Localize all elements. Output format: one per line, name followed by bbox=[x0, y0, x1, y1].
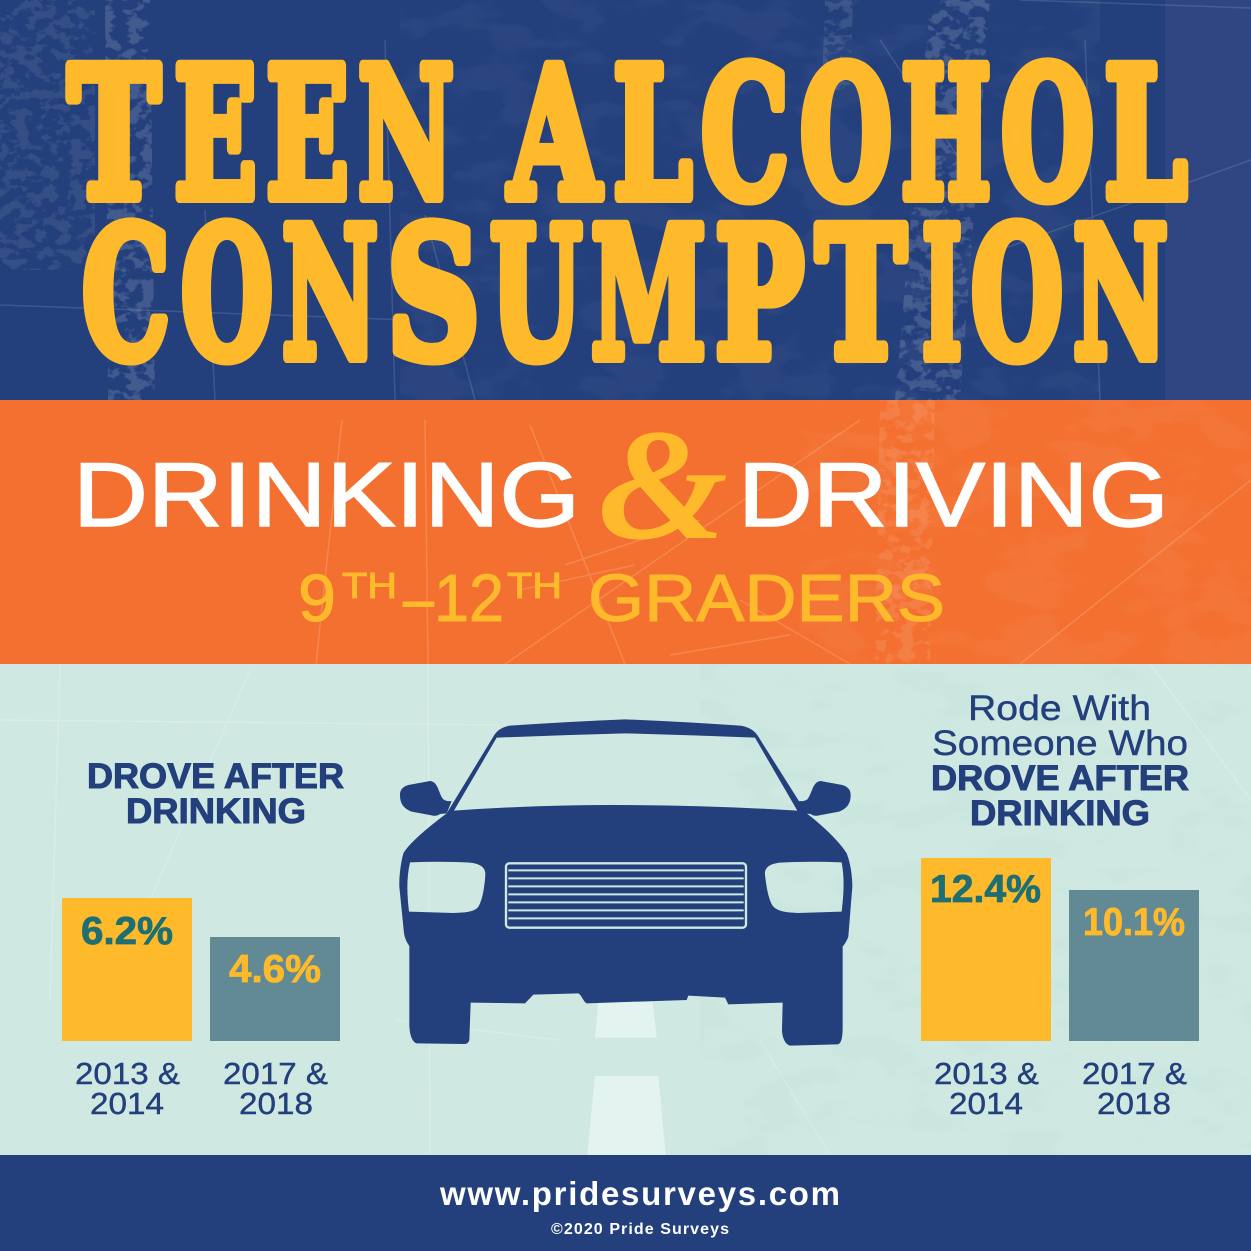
panel: rode with someone who drove after drinking bbox=[921, 689, 1199, 1121]
subtitle: drinking and driving: & bbox=[598, 397, 728, 573]
label: 2017 and 2018: 2018 bbox=[1097, 1086, 1171, 1121]
heading: drove after drinking bbox=[87, 757, 344, 831]
subtitle: grade range: 12 bbox=[434, 561, 504, 636]
title: N bbox=[282, 189, 378, 400]
panel: footer bbox=[0, 1155, 1251, 1251]
subtitle: drinking and driving: DRIVING bbox=[738, 445, 1169, 546]
label: 2013 and 2014 bbox=[934, 1056, 1039, 1121]
panel: navy title band bbox=[0, 0, 1251, 400]
bar: 2017 and 2018, 10.1%: 10.1% bbox=[1083, 901, 1185, 944]
title: O bbox=[800, 29, 892, 240]
heading: rode with someone who: Rode With bbox=[968, 689, 1151, 728]
label: 2017 and 2018: 2017 & bbox=[223, 1056, 328, 1091]
bar: 2013 and 2014, 12.4% bbox=[921, 858, 1051, 1041]
heading: rode with someone who bbox=[932, 689, 1188, 763]
title: N bbox=[358, 29, 454, 240]
bar: 2013 and 2014, 6.2% bbox=[62, 898, 192, 1041]
title: L bbox=[1104, 29, 1187, 240]
bar: 2013 and 2014, 12.4%: 12.4% bbox=[930, 868, 1041, 911]
heading: drove after drinking: DROVE AFTER bbox=[87, 757, 344, 796]
title: A bbox=[508, 29, 602, 240]
panel: drove after drinking bbox=[62, 757, 344, 1121]
subtitle: grade range bbox=[298, 561, 945, 636]
label: 2013 and 2014: 2014 bbox=[90, 1086, 164, 1121]
subtitle: grade range: GRADERS bbox=[588, 561, 945, 636]
subtitle: grade range: 9 bbox=[298, 561, 336, 636]
bar: 2017 and 2018, 4.6%: 4.6% bbox=[229, 948, 321, 991]
title: T bbox=[68, 29, 160, 240]
icon: car front bbox=[399, 719, 852, 1046]
bar: 2013 and 2014, 6.2%: 6.2% bbox=[81, 910, 173, 953]
panel: orange subtitle band bbox=[0, 400, 1251, 665]
title: C bbox=[701, 29, 789, 240]
title: P bbox=[715, 189, 804, 400]
subtitle: drinking and driving: DRINKING bbox=[73, 445, 580, 546]
title: H bbox=[901, 29, 991, 240]
label: 2017 and 2018: 2018 bbox=[239, 1086, 313, 1121]
title: C bbox=[82, 189, 170, 400]
subtitle: grade range: TH bbox=[507, 565, 562, 606]
title: O bbox=[971, 189, 1063, 400]
label: 2017 and 2018: 2017 & bbox=[1082, 1056, 1187, 1091]
title: I bbox=[922, 189, 962, 400]
road markings bbox=[587, 1002, 666, 1155]
label: 2017 and 2018 bbox=[1082, 1056, 1187, 1121]
title: L bbox=[613, 29, 692, 240]
title: O bbox=[181, 189, 273, 400]
copyright: ©2020 Pride Surveys bbox=[551, 1221, 729, 1238]
label: 2013 and 2014: 2014 bbox=[949, 1086, 1023, 1121]
website address: www.pridesurveys.com bbox=[439, 1175, 840, 1212]
bar: 2017 and 2018, 4.6% bbox=[210, 937, 340, 1041]
title: E bbox=[266, 29, 349, 240]
panel: mint data band bbox=[0, 664, 1251, 1155]
label: 2013 and 2014: 2013 & bbox=[934, 1056, 1039, 1091]
heading: drove after drinking: DRINKING bbox=[970, 794, 1150, 833]
title: O bbox=[1001, 29, 1094, 240]
title: E bbox=[174, 29, 257, 240]
title: T bbox=[816, 189, 906, 400]
heading: rode with someone who: Someone Who bbox=[932, 724, 1188, 763]
bar: 2017 and 2018, 10.1% bbox=[1069, 890, 1199, 1041]
heading: drove after drinking bbox=[931, 759, 1189, 833]
subtitle: drinking and driving bbox=[73, 397, 1169, 573]
label: 2017 and 2018 bbox=[223, 1056, 328, 1121]
title: M bbox=[591, 189, 706, 400]
heading: drove after drinking: DRINKING bbox=[126, 792, 306, 831]
subtitle: grade range: – bbox=[403, 561, 435, 636]
title bbox=[68, 29, 1187, 400]
heading: drove after drinking: DROVE AFTER bbox=[931, 759, 1189, 798]
label: 2013 and 2014: 2013 & bbox=[75, 1056, 180, 1091]
title: U bbox=[490, 189, 582, 400]
label: 2013 and 2014 bbox=[75, 1056, 180, 1121]
title: S bbox=[387, 189, 480, 400]
title: N bbox=[1073, 189, 1168, 400]
subtitle: grade range: TH bbox=[342, 565, 397, 606]
